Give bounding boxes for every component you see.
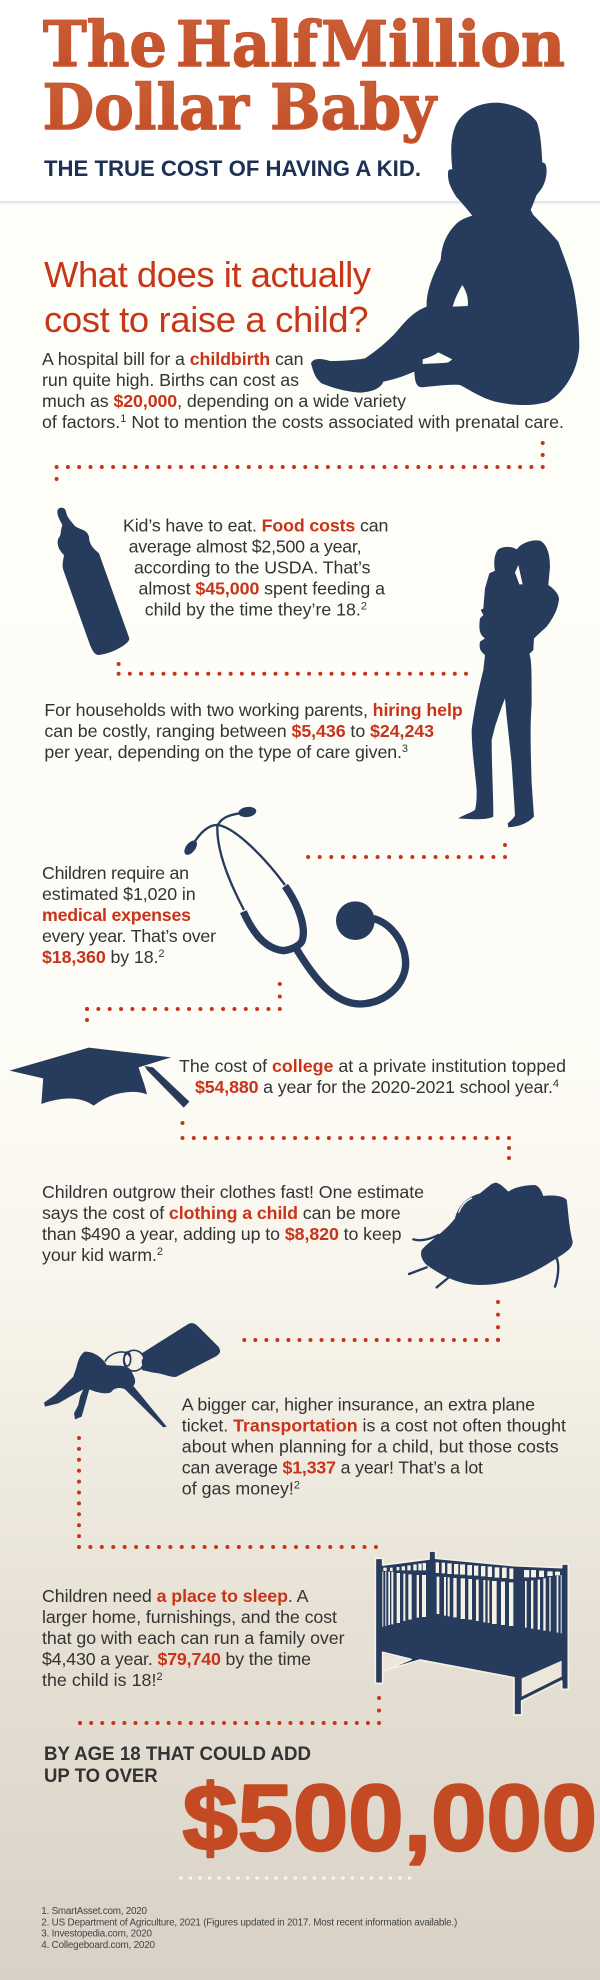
text: hiring help: per year, depending on the type of care given. [44,742,402,762]
white dot rule [181,1876,410,1880]
text: clothing: 2 [157,1246,163,1258]
text: medical expenses: medical expenses [42,905,191,925]
footnotes: 2. US Department of Agriculture, 2021 (Figures updated in 2017. Most recent information available.) [41,1917,457,1928]
text: clothing [42,1182,424,1265]
text: clothing: Children outgrow their clothes fast! One estimate [42,1182,424,1202]
text: food costs: average almost $2,500 a year, [129,537,362,557]
text: childbirth: of factors. [42,412,120,432]
footnotes [41,1906,457,1951]
total lead-in: UP TO OVER [44,1766,158,1787]
heading: cost to raise a child? [44,299,368,340]
connector dots 3 [297,845,505,857]
title: Dollar [42,70,250,144]
header divider [0,201,600,205]
text: childbirth: Not to mention the costs associated with prenatal care. [126,412,564,432]
text: transportation: can average $1,337 a year! That’s a lot [182,1458,483,1478]
connector dots 2 [119,664,466,674]
text: clothing: than $490 a year, adding up to $8,820 to keep [42,1224,402,1244]
text: college: 4 [553,1078,559,1090]
connector dots 6 [233,1302,498,1340]
text: childbirth [42,349,564,432]
text: college: The cost of college at a private institution topped [179,1056,566,1076]
footnotes: 3. Investopedia.com, 2020 [41,1929,152,1940]
connector dots 1 [57,443,543,491]
title: Million [321,7,565,81]
text: hiring help: For households with two working parents, hiring help [44,700,463,720]
text: childbirth: A hospital bill for a childbirth can [42,349,304,369]
text: food costs: almost $45,000 spent feeding a [138,579,385,599]
text: place to sleep [42,1586,345,1690]
icon: baby silhouette [311,103,579,405]
text: childbirth: run quite high. Births can cost as [42,370,299,390]
connector dots 7 [79,1438,376,1547]
text: place to sleep: 2 [156,1671,163,1683]
title [42,7,565,144]
text: transportation: ticket. Transportation is a cost not often thought [182,1416,566,1436]
text: place to sleep: larger home, furnishings, and the cost [42,1607,337,1627]
heading: What does it actually [44,254,372,295]
text: food costs: 2 [361,601,367,613]
title: Half [176,7,322,81]
text: food costs: Kid’s have to eat. Food costs can [123,516,388,536]
text: place to sleep: the child is 18! [42,1670,156,1690]
footnotes: 4. Collegeboard.com, 2020 [41,1940,155,1951]
title: Baby [270,70,438,144]
icon: baby bottle [57,508,129,655]
title: The [43,7,167,81]
total amount: $500,000 [182,1765,597,1870]
text: place to sleep: $4,430 a year. $79,740 by the time [42,1649,311,1669]
icon: graduation cap [10,1048,189,1108]
text: food costs: according to the USDA. That’s [134,558,371,578]
text: childbirth: much as $20,000, depending on a wide variety [42,391,406,411]
icon: keys with fob [44,1323,220,1427]
text: hiring help [44,700,463,762]
text: childbirth: 1 [120,413,126,425]
total lead-in [44,1744,311,1787]
icon: crib [375,1551,568,1715]
text: college [179,1056,566,1097]
icon: baby shoe [409,1183,573,1287]
text: transportation: A bigger car, higher insurance, an extra plane [182,1395,535,1415]
footnotes: 1. SmartAsset.com, 2020 [41,1906,147,1917]
icon: parent holding child [458,540,559,827]
text: transportation: about when planning for a child, but those costs [182,1437,559,1457]
text: place to sleep: that go with each can run a family over [42,1628,345,1648]
text: transportation [182,1395,566,1499]
connector dots 4 [87,984,280,1031]
text: food costs [123,516,388,620]
text: transportation: 2 [294,1480,300,1492]
text: medical expenses: every year. That’s over [42,926,216,946]
text: medical expenses: estimated $1,020 in [42,884,196,904]
heading [44,254,372,340]
text: hiring help: 3 [402,743,408,755]
total lead-in: BY AGE 18 THAT COULD ADD [44,1744,311,1765]
text: medical expenses: $18,360 by 18. [42,947,158,967]
connector dots 5 [182,1123,509,1168]
subtitle: THE TRUE COST OF HAVING A KID. [44,156,421,181]
text: medical expenses: Children require an [42,863,189,883]
text: clothing: says the cost of clothing a child can be more [42,1203,401,1223]
text: hiring help: can be costly, ranging between $5,436 to $24,243 [44,721,434,741]
text: medical expenses [42,863,216,967]
text: medical expenses: 2 [158,948,164,960]
text: college: $54,880 a year for the 2020-2021 school year. [195,1077,553,1097]
connector dots 8 [80,1698,379,1734]
text: food costs: child by the time they’re 18. [145,600,361,620]
text: transportation: of gas money! [182,1479,294,1499]
text: place to sleep: Children need a place to sleep. A [42,1586,309,1606]
text: clothing: your kid warm. [42,1245,157,1265]
icon: stethoscope [182,806,406,1004]
